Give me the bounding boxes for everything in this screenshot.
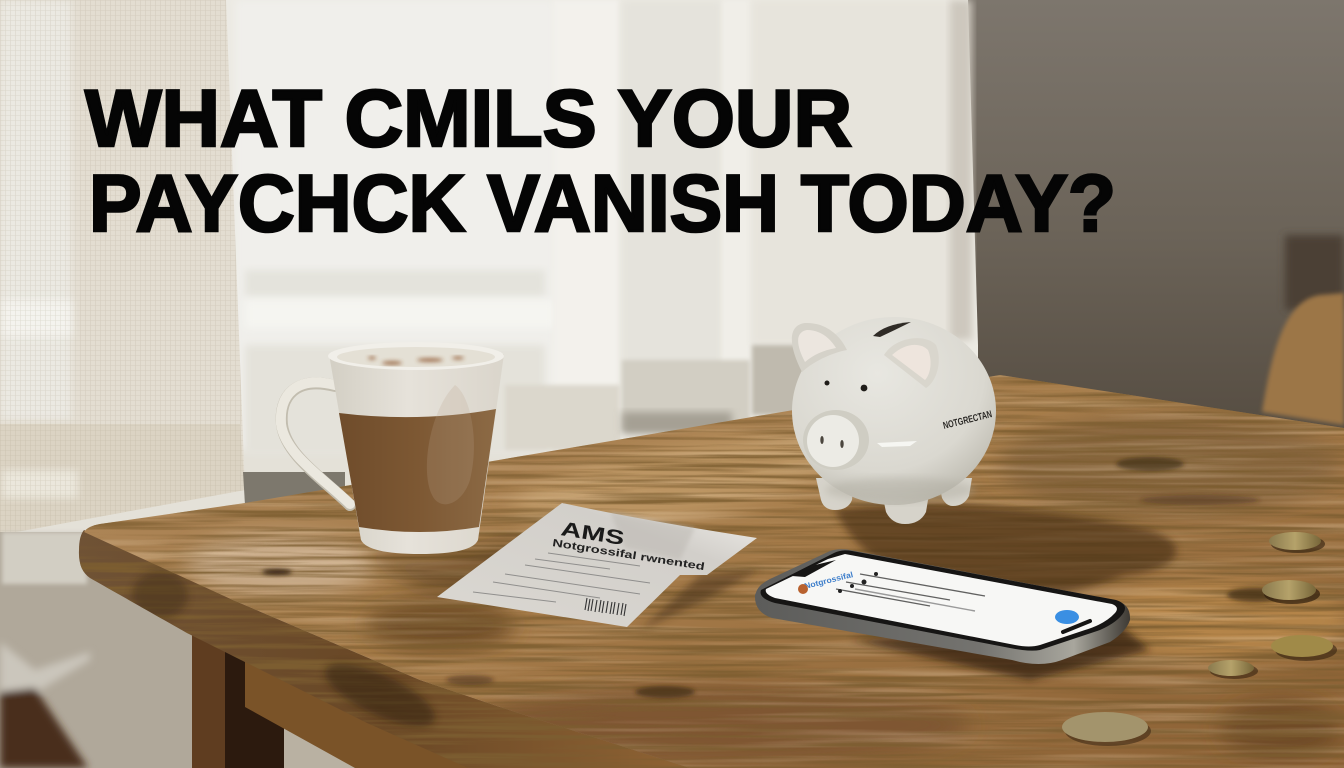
title line 1: WHAT CMILS YOUR xyxy=(85,74,852,164)
coin 2 xyxy=(1262,580,1320,604)
coin 3 xyxy=(1271,635,1337,661)
table edge xyxy=(78,530,690,768)
receipt heading: AMS xyxy=(559,518,626,550)
window sill and lower wall xyxy=(0,472,500,768)
background furniture xyxy=(1262,235,1344,425)
coin 4 xyxy=(1208,660,1258,679)
table apron xyxy=(245,655,470,768)
coin 1 xyxy=(1269,532,1325,553)
sheer left curtain xyxy=(0,0,245,535)
pig label: NOTGRECTAN xyxy=(942,409,993,432)
chair back xyxy=(1262,293,1344,425)
coins xyxy=(1062,532,1337,746)
title line 2: PAYCHCK VANISH TODAY? xyxy=(89,159,1116,249)
pig feet xyxy=(816,478,972,524)
title xyxy=(85,74,1116,249)
pig eyes xyxy=(824,380,830,386)
receipt xyxy=(437,503,760,630)
phone screen xyxy=(766,554,1117,646)
background wall xyxy=(960,0,1344,430)
phone blue button xyxy=(1055,610,1079,624)
mug handle xyxy=(281,382,350,505)
barcode xyxy=(585,598,626,616)
phone app heading: Notgrossifal xyxy=(803,570,854,591)
icon: coffee mug xyxy=(281,342,504,554)
pig left ear xyxy=(792,323,847,372)
shadow: piggy bank xyxy=(835,504,1176,597)
icon: piggy bank xyxy=(792,317,996,524)
table leg xyxy=(192,625,470,768)
table xyxy=(0,370,1344,768)
knots xyxy=(262,457,1283,698)
coin 5 xyxy=(1062,712,1151,746)
coffee band xyxy=(339,409,496,532)
receipt subheading: Notgrossifal rwnented xyxy=(552,537,706,573)
phone app avatar xyxy=(798,584,808,594)
icon: smartphone xyxy=(755,549,1150,680)
coffee residue xyxy=(368,356,464,365)
pig snout xyxy=(803,410,869,470)
curtains and window xyxy=(0,0,978,540)
shadow: mug xyxy=(355,538,560,594)
phone app list xyxy=(836,572,985,611)
phone body xyxy=(755,549,1130,664)
pig slot xyxy=(873,322,911,337)
foreground chair xyxy=(0,642,90,768)
mug body xyxy=(329,354,504,554)
pig body xyxy=(792,317,996,505)
mug rim xyxy=(328,342,504,370)
pig right ear xyxy=(884,338,939,388)
table top xyxy=(84,375,1344,768)
